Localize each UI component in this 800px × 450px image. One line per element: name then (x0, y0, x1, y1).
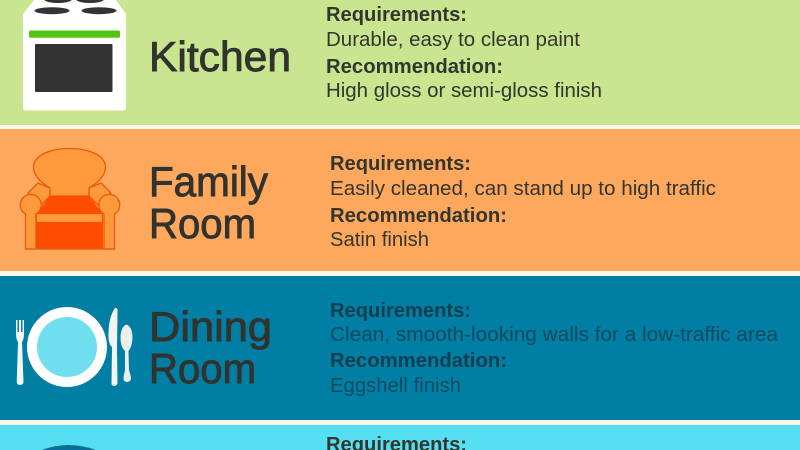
text: family room recommendation (330, 205, 507, 251)
heading: Dining Room (149, 303, 272, 392)
text: family room requirements: Easily cleaned, can stand up to high traffic (330, 178, 716, 200)
text: kitchen requirements (326, 4, 580, 51)
icon: stove (23, 0, 126, 110)
text: dining room recommendation: Eggshell finish (330, 375, 461, 397)
icon: knife (108, 308, 118, 386)
panel: dining room (0, 276, 800, 420)
text: kitchen recommendation (326, 56, 602, 102)
heading: Dining Room: Room (149, 345, 256, 392)
heading: Family Room: Family (149, 158, 268, 205)
panel: kitchen (0, 0, 800, 125)
icon: cropped round icon (42, 445, 96, 450)
text: kitchen requirements: Durable, easy to clean paint (326, 29, 580, 51)
text: family room recommendation: Satin finish (330, 229, 429, 251)
icon: plate (27, 307, 107, 387)
text: dining room requirements (330, 300, 779, 346)
heading: Kitchen: Kitchen (149, 33, 291, 80)
panel: family room (0, 129, 800, 271)
text: family room recommendation: Recommendation: (330, 205, 507, 227)
text: dining room requirements: Clean, smooth-looking walls for a low-traffic area (330, 324, 779, 346)
text: dining room recommendation (330, 350, 507, 397)
text: dining room requirements: Requirements: (330, 300, 471, 322)
heading: Family Room (149, 158, 268, 247)
text: dining room recommendation: Recommendation: (330, 350, 507, 372)
text: kitchen recommendation: Recommendation: (326, 56, 503, 78)
icon: fork (16, 320, 24, 385)
text: family room requirements (330, 153, 716, 200)
heading: Dining Room: Dining (149, 303, 272, 350)
icon: spoon (120, 324, 132, 382)
heading: Family Room: Room (149, 200, 256, 247)
icon: armchair (20, 148, 120, 249)
text: kitchen recommendation: High gloss or semi-gloss finish (326, 80, 602, 102)
text: kitchen requirements: Requirements: (326, 4, 467, 26)
text: family room requirements: Requirements: (330, 153, 471, 175)
panel: next room, cropped (0, 425, 800, 450)
icon: plate and cutlery (16, 307, 132, 387)
